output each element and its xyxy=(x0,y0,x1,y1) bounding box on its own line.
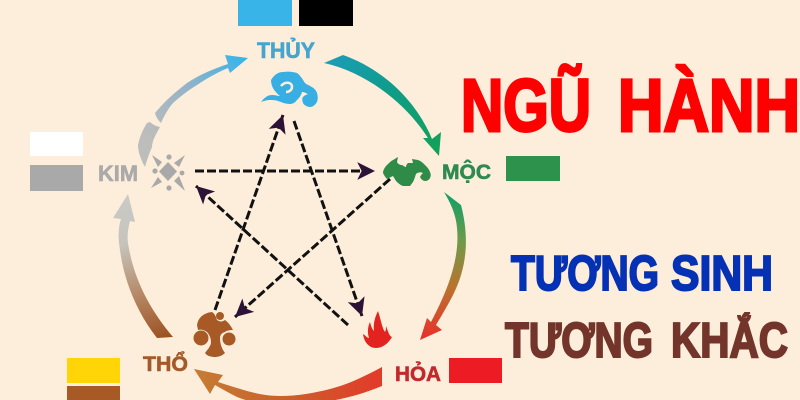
icon: wood xyxy=(383,157,431,186)
dashed arrow: Hỏa to Kim xyxy=(196,186,348,325)
swatch: Thổ yellow xyxy=(67,358,120,383)
heading: Tương Khắc xyxy=(505,313,788,368)
dashed arrow: Thổ to Thủy xyxy=(215,115,283,310)
label: Thủy: THỦY xyxy=(257,38,315,63)
label: Thổ: THỔ xyxy=(143,352,188,376)
dashed arrow: Mộc to Thổ xyxy=(235,179,390,317)
swatch: Kim white xyxy=(30,132,83,156)
arrow: Hỏa to Thổ xyxy=(194,367,382,400)
label: Kim: KIM xyxy=(98,161,138,186)
swatch: Thổ brown xyxy=(67,386,120,400)
swatch: Kim gray xyxy=(30,165,83,191)
label: Hỏa: HỎA xyxy=(395,362,441,386)
swatch: Mộc green xyxy=(506,156,560,181)
heading: Tương Sinh: TƯƠNG xyxy=(511,247,659,301)
title: Ngũ Hành: NGŨ xyxy=(461,64,591,147)
dashed arrow: Thủy to Hỏa xyxy=(294,121,362,316)
icon: earth xyxy=(194,312,236,357)
icon: water xyxy=(261,72,318,107)
swatch: Thủy blue xyxy=(238,0,292,26)
arrow: Mộc to Hỏa xyxy=(420,192,466,340)
icon: fire xyxy=(363,311,392,348)
icon: metal xyxy=(151,154,185,191)
title: Ngũ Hành xyxy=(461,64,800,147)
arrow: Thổ to Kim xyxy=(113,194,173,338)
arrow: Thủy to Mộc xyxy=(324,55,441,156)
arrow: Kim to Thủy xyxy=(138,55,248,167)
heading: Tương Sinh: SINH xyxy=(671,247,773,301)
dashed arrow: Kim to Mộc xyxy=(195,170,375,172)
swatch: Hỏa red xyxy=(449,358,502,383)
swatch: Thủy black xyxy=(299,0,353,26)
label: Mộc: MỘC xyxy=(442,160,491,184)
heading: Tương Khắc: TƯƠNG xyxy=(505,314,653,368)
